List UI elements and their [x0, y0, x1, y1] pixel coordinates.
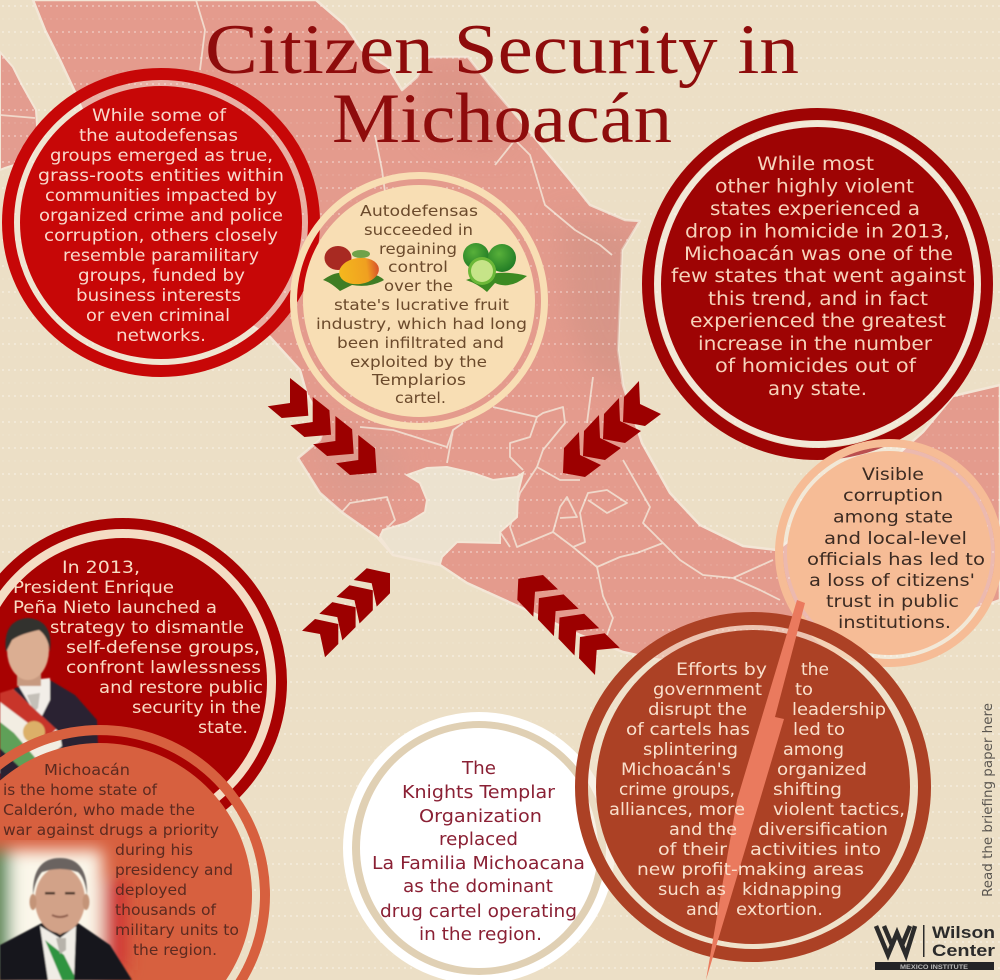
panel: Knights Templar: The — [461, 759, 496, 779]
panel: Calderón home state: is the home state of — [3, 781, 158, 799]
panel: Knights Templar: Knights Templar — [402, 783, 556, 803]
panel: autodefensas groups: resemble paramilitary — [63, 246, 259, 265]
panel: Calderón home state: war against drugs a priority — [3, 821, 219, 839]
panel: Peña Nieto strategy: In 2013, — [62, 558, 140, 578]
panel: visible corruption: institutions. — [838, 613, 951, 633]
panel: leadership disruption: Michoacán's — [621, 760, 731, 779]
panel: leadership disruption: Efforts by — [676, 660, 767, 679]
panel: leadership disruption: new profit-making areas — [637, 860, 864, 879]
panel: visible corruption — [779, 443, 999, 663]
panel: Peña Nieto strategy: strategy to dismantle — [50, 618, 244, 638]
panel: autodefensas groups: networks. — [116, 326, 206, 345]
panel: Peña Nieto strategy — [0, 524, 282, 840]
panel: visible corruption: among state — [833, 508, 953, 528]
panel: visible corruption: Visible — [862, 465, 924, 485]
panel: homicide increase: Michoacán was one of the — [684, 244, 953, 265]
icon: mangoes — [323, 246, 384, 291]
panel: Calderón home state: Calderón, who made the — [3, 801, 195, 819]
panel: Calderón home state: during his — [115, 841, 193, 859]
arrows: chevrons lower right — [517, 575, 620, 675]
panel: homicide increase: of homicides out of — [715, 356, 917, 377]
panel: Peña Nieto strategy: confront lawlessness — [66, 658, 261, 678]
panel: autodefensas groups: groups, funded by — [78, 266, 245, 285]
photo: Enrique Peña Nieto — [0, 618, 98, 790]
panel: leadership disruption: among — [783, 740, 844, 759]
panel: autodefensas groups: communities impacted by — [45, 186, 277, 205]
title: Citizen Security in — [205, 11, 799, 89]
panel: fruit industry: control — [388, 258, 448, 276]
icon: limes — [463, 243, 527, 292]
panel: Calderón home state: the region. — [133, 941, 217, 959]
panel: Knights Templar: drug cartel operating — [380, 902, 577, 922]
map: Michoacán highlighted — [380, 467, 523, 564]
title: Michoacán — [332, 80, 672, 158]
panel: leadership disruption: extortion. — [736, 900, 823, 919]
panel: Calderón home state: Michoacán — [44, 761, 130, 779]
panel: autodefensas groups: corruption, others closely — [44, 226, 278, 245]
panel: leadership disruption: shifting — [773, 780, 842, 799]
panel: Knights Templar: as the dominant — [403, 877, 553, 897]
panel: leadership disruption: the — [801, 660, 829, 679]
panel: autodefensas groups: groups emerged as true, — [50, 146, 273, 165]
panel: Peña Nieto strategy: security in the — [132, 698, 261, 718]
map: state borders — [0, 0, 780, 635]
arrows: chevrons upper left — [268, 378, 377, 475]
panel: Calderón home state: military units to — [115, 921, 239, 939]
panel: Calderón home state — [0, 725, 270, 980]
panel: autodefensas groups: While some of — [92, 106, 227, 125]
map: darker shading — [310, 62, 640, 505]
panel: leadership disruption: organized — [777, 760, 867, 779]
panel: leadership disruption: leadership — [792, 700, 886, 719]
panel: fruit industry: been infiltrated and — [337, 334, 504, 352]
panel: autodefensas groups: grass-roots entities within — [38, 166, 284, 185]
panel: homicide increase: this trend, and in fact — [708, 289, 928, 310]
panel: homicide increase: increase in the number — [698, 334, 932, 355]
panel: leadership disruption: activities into — [750, 840, 881, 859]
panel: autodefensas groups — [8, 74, 314, 371]
panel: fruit industry: exploited by the — [350, 353, 487, 371]
logo: Wilson Center: Center — [932, 941, 995, 960]
map: mainland — [33, 0, 1000, 660]
panel: homicide increase: While most — [757, 154, 874, 175]
panel: visible corruption: officials has led to — [807, 550, 985, 570]
panel: Peña Nieto strategy: self-defense groups, — [66, 638, 260, 658]
panel: Peña Nieto strategy: President Enrique — [13, 578, 174, 598]
panel: homicide increase: few states that went against — [671, 266, 966, 287]
panel: leadership disruption: and — [686, 900, 719, 919]
panel: fruit industry: regaining — [379, 240, 457, 258]
arrows: chevrons upper right — [563, 381, 661, 477]
panel: leadership disruption: alliances, more — [609, 800, 745, 819]
panel: homicide increase: other highly violent — [715, 176, 914, 198]
panel: homicide increase: states experienced a — [710, 199, 920, 220]
panel: autodefensas groups: the autodefensas — [79, 126, 238, 145]
logo: Wilson Center: MEXICO INSTITUTE — [900, 964, 969, 971]
panel: homicide increase: any state. — [768, 379, 867, 400]
panel: autodefensas groups: or even criminal — [86, 306, 230, 325]
panel: homicide increase — [648, 114, 987, 454]
panel: fruit industry: over the — [384, 277, 453, 295]
panel: leadership disruption: diversification — [758, 820, 888, 839]
panel: fruit industry: Templarios — [371, 371, 466, 389]
panel: fruit industry: cartel. — [395, 389, 446, 407]
panel: leadership disruption: of their — [658, 840, 727, 859]
panel: leadership disruption: and the — [669, 820, 737, 839]
panel: Knights Templar: Organization — [419, 807, 542, 827]
panel: Knights Templar: replaced — [439, 830, 518, 850]
panel: fruit industry: succeeded in — [364, 221, 473, 239]
panel: leadership disruption: kidnapping — [742, 880, 842, 899]
panel: leadership disruption: led to — [793, 720, 845, 739]
arrows: chevrons lower left — [302, 568, 390, 657]
panel: leadership disruption: such as — [658, 880, 726, 899]
panel: leadership disruption: splintering — [643, 740, 738, 759]
logo: Wilson Center: Wilson — [932, 923, 995, 942]
panel: leadership disruption: government — [653, 680, 763, 699]
panel: Knights Templar: in the region. — [419, 925, 542, 945]
panel: homicide increase: drop in homicide in 2013, — [685, 222, 950, 242]
panel: visible corruption: corruption — [843, 486, 943, 506]
photo: Felipe Calderón — [0, 850, 132, 980]
panel: fruit industry: industry, which had long — [316, 315, 527, 333]
panel: leadership disruption: crime groups, — [619, 780, 735, 799]
panel: Calderón home state: presidency and — [115, 861, 233, 879]
map: Baja California fragment — [0, 52, 38, 170]
panel: Calderón home state: thousands of — [115, 901, 217, 919]
panel: leadership disruption — [582, 600, 924, 980]
panel: homicide increase: experienced the greatest — [690, 311, 946, 332]
map of Mexico — [0, 0, 1000, 660]
panel: Knights Templar: La Familia Michoacana — [372, 854, 585, 874]
title — [205, 11, 799, 158]
panel: leadership disruption: to — [795, 680, 813, 699]
panel: autodefensas groups: business interests — [76, 286, 241, 305]
panel: Peña Nieto strategy: state. — [198, 718, 248, 738]
panel: visible corruption: a loss of citizens' — [809, 571, 975, 591]
panel: leadership disruption: of cartels has — [626, 720, 750, 739]
panel: visible corruption: trust in public — [826, 592, 959, 612]
panel: Calderón home state: deployed — [115, 881, 187, 899]
panel: leadership disruption: disrupt the — [648, 700, 747, 719]
panel: Knights Templar — [343, 712, 615, 980]
panel: visible corruption: and local-level — [824, 529, 967, 549]
panel: fruit industry: Autodefensas — [360, 202, 478, 220]
icon: lightning bolt — [706, 600, 805, 980]
icon: W mark — [876, 926, 915, 955]
panel: fruit industry: state's lucrative fruit — [334, 296, 509, 314]
panel: autodefensas groups: organized crime and police — [39, 206, 283, 225]
logo: Wilson Center — [875, 923, 995, 971]
side link text: Read the briefing paper here — [980, 703, 996, 897]
panel: leadership disruption: violent tactics, — [773, 800, 905, 819]
panel: Peña Nieto strategy: Peña Nieto launched a — [13, 598, 217, 618]
panel: fruit industry — [294, 176, 544, 426]
panel: Peña Nieto strategy: and restore public — [99, 678, 263, 698]
